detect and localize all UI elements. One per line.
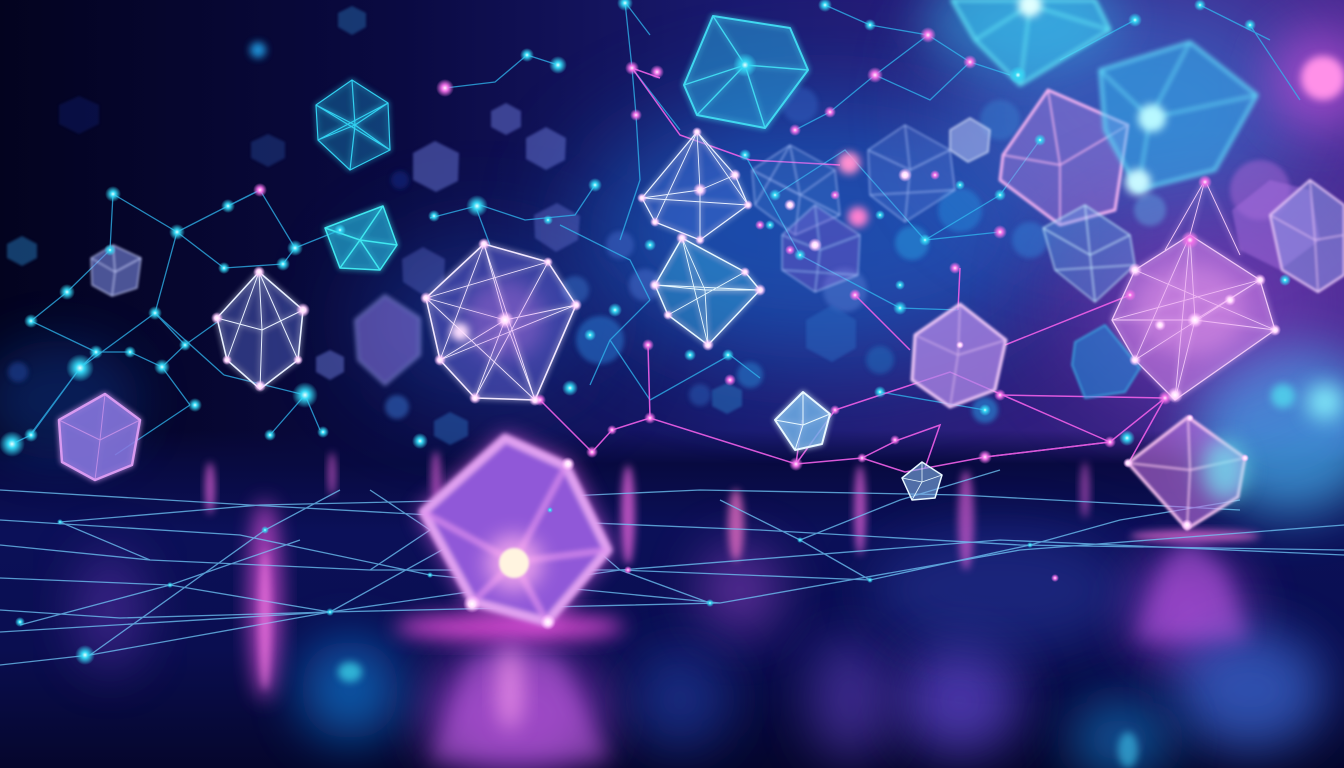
white nodes (211, 127, 1281, 630)
polyhedron: right edge (1270, 180, 1344, 292)
magenta nodes (253, 27, 1212, 582)
polyhedron: wire upper center (642, 132, 748, 240)
bright glows (250, 0, 1344, 420)
polyhedron: pink hex center right (912, 304, 1006, 407)
floor (0, 430, 1344, 768)
polyhedron: cyan large top right (1100, 42, 1257, 190)
background pale polyhedra (7, 6, 1320, 445)
background sky (0, 0, 1344, 500)
polyhedron: pink outline upper right (1000, 90, 1128, 225)
polyhedron: wire right cluster (1112, 180, 1275, 400)
polyhedron: cluster wires center right (752, 125, 955, 292)
polyhedron: cyan mid (325, 206, 397, 270)
polyhedron: lower left hex (59, 394, 140, 480)
polyhedron: big wire center left (426, 244, 576, 400)
background bokeh (8, 87, 1290, 423)
polyhedron: lilac small (950, 118, 990, 162)
bottom haze (259, 550, 1138, 768)
polyhedron: pink gem right (1128, 417, 1245, 529)
polyhedron: blue hex (1072, 325, 1140, 398)
floor reflections (75, 451, 1325, 768)
network lines magenta (540, 68, 1165, 472)
polyhedron: wire center (655, 238, 760, 345)
polyhedron: wire mid right (1043, 205, 1135, 302)
ambient glow (0, 0, 1344, 515)
polyhedron: tiny white (902, 462, 942, 500)
polyhedron: cyan very top (952, 0, 1110, 85)
large foreground polyhedron (417, 433, 614, 628)
polyhedron: cyan small top left (316, 80, 390, 170)
polyhedron: fuzzy cluster (355, 295, 420, 385)
polyhedron: cyan top (684, 16, 808, 128)
floor grid (0, 470, 1344, 665)
network lines cyan (12, 2, 1300, 455)
big wire polyhedra (59, 0, 1344, 529)
polyhedron: wire left (217, 272, 303, 389)
polyhedron: small white (775, 392, 830, 450)
polyhedron: left lilac (91, 245, 141, 296)
